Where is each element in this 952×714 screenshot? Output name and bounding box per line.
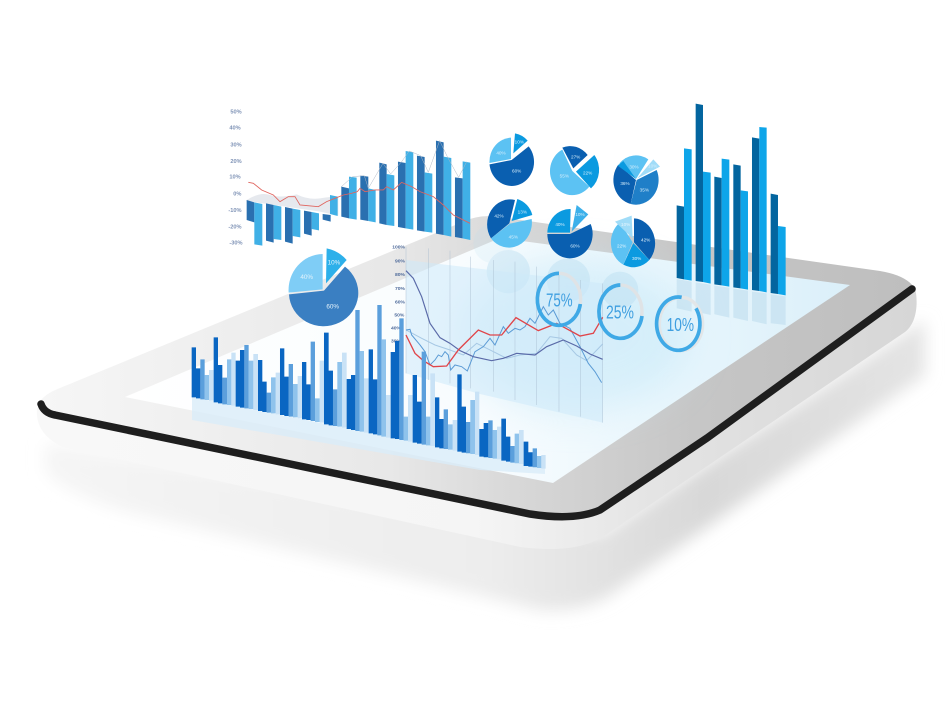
- dark bars: [391, 341, 533, 467]
- line chart: [391, 245, 603, 423]
- axis labels: 40%: [229, 126, 241, 132]
- axis labels: -30%: [229, 241, 243, 247]
- medium bars: [200, 305, 382, 435]
- lightest bars: [209, 353, 369, 433]
- large pie labels: 40%: [300, 274, 313, 281]
- axis labels: 20%: [230, 159, 242, 165]
- pie 3: 30%: [629, 164, 639, 169]
- pie reflections on screen: [473, 223, 638, 308]
- right bar chart: [677, 104, 786, 325]
- pie 3: 10%: [648, 163, 657, 168]
- red series: [406, 317, 603, 367]
- red trend line: [248, 182, 470, 223]
- pie 3: [613, 155, 660, 205]
- medium bars: [399, 318, 537, 467]
- axis labels: -10%: [228, 208, 242, 214]
- ring 75%: [537, 273, 581, 325]
- bar reflections: [677, 279, 786, 325]
- pie 4: 13%: [518, 209, 527, 214]
- top-left bar chart: [228, 109, 470, 247]
- pie 4: 45%: [509, 235, 518, 240]
- dark bars: [247, 141, 463, 244]
- dark bars: [677, 104, 778, 294]
- ring 25%: [599, 285, 642, 338]
- pie 5: 10%: [575, 212, 585, 217]
- pie 5: 40%: [555, 222, 565, 227]
- axis labels: -20%: [228, 225, 242, 231]
- tablet body edge: [37, 288, 917, 549]
- line chart axis labels: 100%: [392, 245, 406, 251]
- pie 6: 10%: [621, 222, 630, 227]
- slice 40%: [289, 254, 323, 293]
- ring 25%: 25%: [606, 301, 634, 322]
- pie 1: 40%: [496, 150, 506, 155]
- pie 2: 22%: [583, 170, 592, 175]
- large pie chart: [289, 248, 358, 326]
- bottom bar reflection: [192, 397, 545, 474]
- bottom bar chart left: [192, 305, 382, 435]
- pie 6: 30%: [632, 256, 641, 261]
- ring 10%: 10%: [667, 314, 694, 335]
- pie 5: 60%: [570, 243, 580, 248]
- large pie labels: 10%: [328, 260, 341, 267]
- black rim: [41, 289, 912, 517]
- light bars: [205, 351, 364, 432]
- navy series: [406, 271, 603, 361]
- lightest bars: [386, 373, 546, 469]
- axis labels: 0%: [233, 192, 241, 198]
- pale blue series: [406, 330, 603, 361]
- light bars: [381, 339, 541, 468]
- six pie charts: [487, 133, 660, 267]
- pie 6: 42%: [641, 238, 650, 243]
- progress rings: [537, 273, 703, 351]
- tablet screen: [125, 238, 850, 483]
- pie 4: [487, 199, 532, 248]
- line chart axis labels: 70%: [395, 286, 406, 292]
- axis labels: 10%: [229, 175, 241, 181]
- zero-line area: [247, 194, 338, 216]
- pie 3: 36%: [620, 181, 630, 186]
- tablet: [37, 216, 917, 549]
- axis labels: [228, 109, 243, 247]
- large pie labels: 60%: [326, 303, 339, 310]
- bottom bar chart right: [381, 318, 546, 469]
- jagged blue series: [406, 307, 602, 383]
- dark bars: [192, 333, 377, 434]
- line chart axis labels: 40%: [391, 325, 402, 331]
- ring 10%: [657, 297, 703, 351]
- pie 4: 42%: [494, 213, 504, 218]
- pie 1: 60%: [512, 169, 521, 174]
- line chart axis labels: 80%: [395, 272, 406, 278]
- ring 75%: 75%: [546, 290, 573, 311]
- pie 2: [550, 146, 599, 195]
- line chart axis labels: [391, 245, 406, 345]
- axis labels: 50%: [230, 109, 242, 115]
- line chart axis labels: 30%: [391, 339, 402, 345]
- pie 2: 55%: [560, 174, 569, 179]
- light bars: [684, 127, 786, 295]
- line chart axis labels: 60%: [395, 300, 406, 306]
- tablet top surface bezel: [38, 216, 914, 516]
- pie 6: [611, 216, 655, 267]
- pie 1: [489, 133, 534, 186]
- pie 1: 10%: [515, 140, 524, 145]
- large pie labels: [300, 260, 341, 310]
- line chart panel: [406, 260, 603, 423]
- pie 6: 22%: [617, 244, 626, 249]
- pie 5: [547, 205, 593, 258]
- pie 3: 35%: [640, 188, 649, 193]
- line chart axis labels: 50%: [394, 313, 405, 319]
- light bars: [254, 151, 470, 246]
- tablet reflection shadow: [45, 320, 925, 610]
- screen glow: [460, 260, 690, 410]
- pie 2: 27%: [571, 154, 580, 159]
- connector line: [341, 141, 467, 188]
- axis labels: 30%: [230, 142, 242, 148]
- line chart axis labels: 90%: [395, 259, 406, 265]
- slice 60%: [289, 267, 358, 326]
- slice 10%: [326, 248, 347, 283]
